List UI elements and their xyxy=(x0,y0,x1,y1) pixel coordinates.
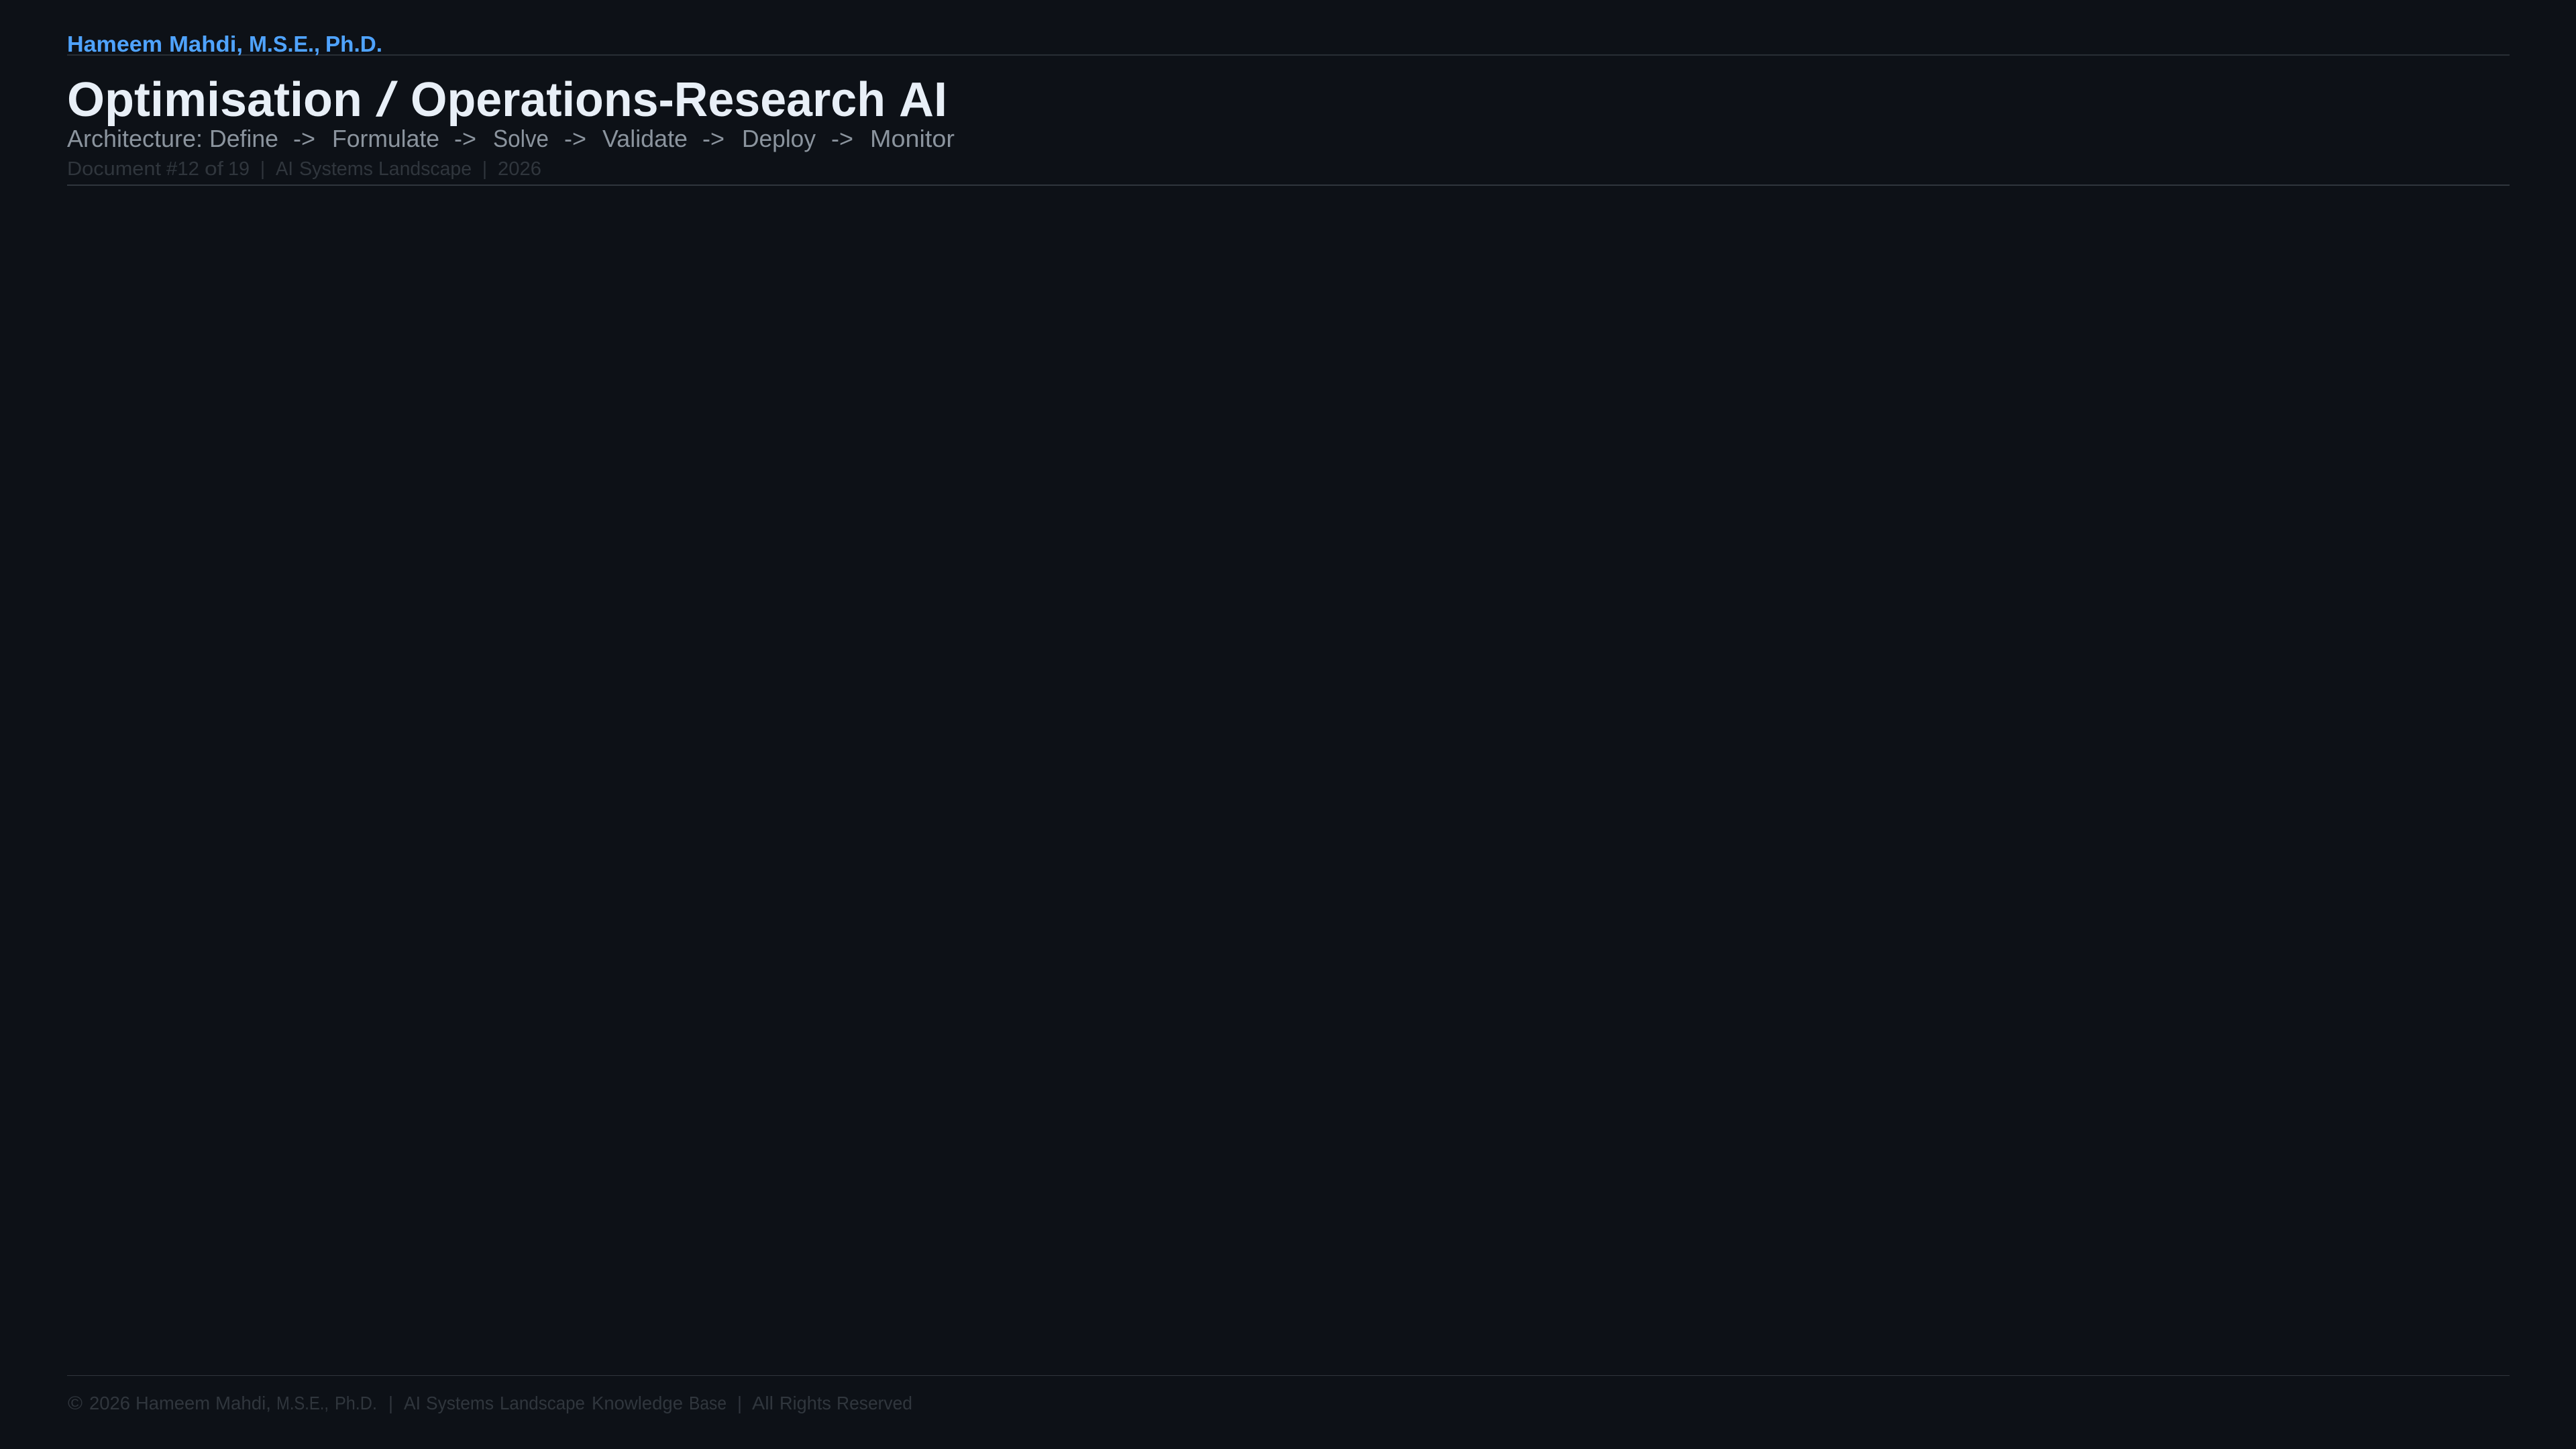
subtitle: architecture pipeline: -> xyxy=(831,125,853,152)
subtitle: architecture pipeline: Validate xyxy=(602,125,688,152)
footer copyright: All xyxy=(752,1393,773,1413)
title: Operations-Research xyxy=(411,73,885,127)
footer copyright: Knowledge xyxy=(592,1393,683,1413)
author name: M.S.E., xyxy=(249,32,320,56)
title: / xyxy=(376,73,398,127)
footer copyright: Rights xyxy=(780,1393,831,1413)
subtitle: architecture pipeline: -> xyxy=(454,125,476,152)
footer copyright: Base xyxy=(689,1393,727,1413)
document reference line: 2026 xyxy=(498,158,541,180)
footer copyright: AI xyxy=(404,1393,421,1413)
subtitle: architecture pipeline: Formulate xyxy=(332,125,439,152)
subtitle: architecture pipeline: -> xyxy=(702,125,724,152)
footer copyright: Reserved xyxy=(837,1393,912,1413)
author name: Hameem xyxy=(67,32,162,56)
footer copyright: © xyxy=(68,1393,83,1413)
footer copyright: Ph.D. xyxy=(335,1393,377,1413)
footer copyright: Mahdi, xyxy=(215,1393,271,1413)
footer copyright: | xyxy=(388,1393,393,1413)
document reference line: 19 xyxy=(228,158,250,180)
subtitle: architecture pipeline: -> xyxy=(564,125,586,152)
author name: Ph.D. xyxy=(325,32,382,56)
footer copyright: | xyxy=(737,1393,742,1413)
subtitle: architecture pipeline: Monitor xyxy=(870,125,955,152)
subtitle: architecture pipeline: Solve xyxy=(493,125,549,152)
footer copyright: M.S.E., xyxy=(276,1393,329,1413)
footer copyright: Landscape xyxy=(500,1393,585,1413)
author name: Mahdi, xyxy=(169,32,243,56)
subtitle: architecture pipeline: Define xyxy=(209,125,278,152)
title: Optimisation xyxy=(67,73,362,127)
footer copyright: Hameem xyxy=(136,1393,210,1413)
document reference line: of xyxy=(205,158,224,180)
document reference line: Systems xyxy=(299,158,373,180)
subtitle: architecture pipeline: Architecture: xyxy=(67,125,203,152)
document reference line: | xyxy=(260,158,265,180)
document reference line: AI xyxy=(276,158,293,180)
subtitle: architecture pipeline: -> xyxy=(293,125,315,152)
footer copyright: 2026 xyxy=(89,1393,130,1413)
subtitle: architecture pipeline: Deploy xyxy=(742,125,816,152)
document reference line: Document xyxy=(67,158,161,180)
footer copyright: Systems xyxy=(426,1393,494,1413)
document reference line: Landscape xyxy=(378,158,472,180)
document reference line: | xyxy=(482,158,487,180)
document reference line: #12 xyxy=(166,158,199,180)
title: AI xyxy=(899,73,947,127)
